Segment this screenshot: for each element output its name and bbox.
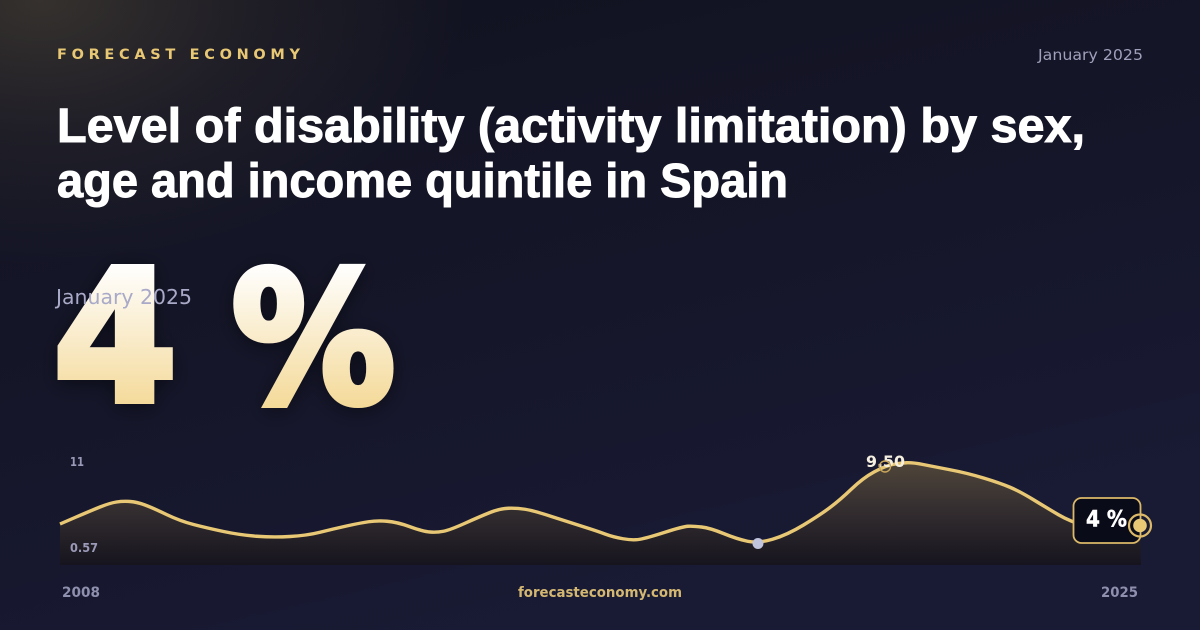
- minimum marker: [752, 538, 764, 549]
- source url: forecasteconomy.com: [518, 585, 682, 601]
- title: [57, 100, 1085, 208]
- peak marker: [880, 461, 890, 472]
- date top right: January 2025: [1037, 46, 1143, 64]
- current value callout: [1074, 498, 1140, 543]
- big value: 4: [54, 232, 177, 443]
- y axis min label: 0.57: [70, 541, 98, 555]
- title: Level of disability (activity limitation) by sex,: [57, 100, 1085, 153]
- title: age and income quintile in Spain: [57, 155, 788, 208]
- chart area fill: [60, 463, 1141, 565]
- brand label: FORECAST ECONOMY: [57, 47, 300, 63]
- date over big value: January 2025: [54, 285, 192, 309]
- line chart: [60, 452, 1151, 565]
- y axis max label: 11: [70, 455, 84, 469]
- peak value label: 9.50: [866, 452, 905, 471]
- chart line: [60, 463, 1140, 542]
- current value marker: [1129, 514, 1151, 536]
- x axis end year: 2025: [1101, 585, 1138, 601]
- current value callout: 4 %: [1086, 508, 1127, 532]
- big value: [54, 232, 395, 444]
- x axis start year: 2008: [62, 585, 100, 601]
- big value: %: [232, 236, 395, 444]
